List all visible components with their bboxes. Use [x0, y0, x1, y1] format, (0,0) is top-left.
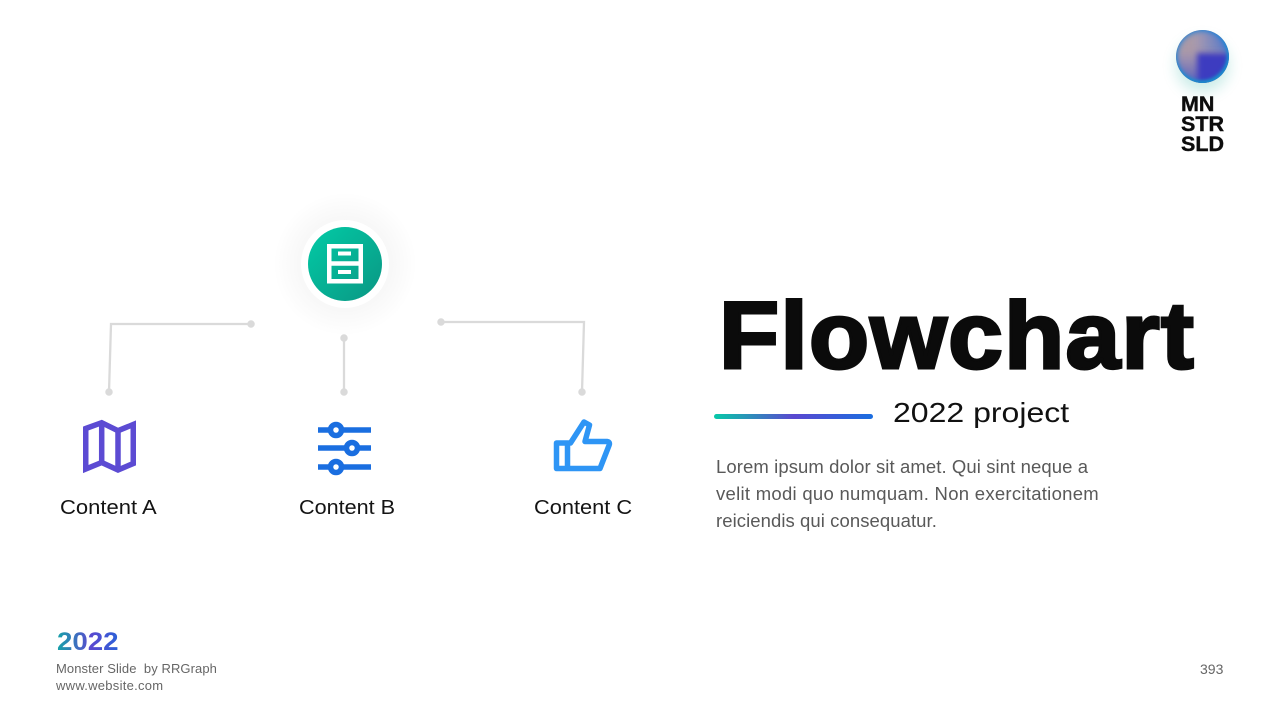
logo	[1170, 30, 1235, 156]
description: Lorem ipsum dolor sit amet. Qui sint neque a	[716, 456, 1088, 477]
logo text: SLD	[1181, 132, 1224, 156]
logo text: MN	[1181, 92, 1214, 116]
logo orb	[1176, 30, 1229, 83]
icon: sliders	[318, 424, 371, 472]
connector middle	[341, 335, 347, 395]
footer credit: Monster Slide by RRGraph	[56, 661, 217, 676]
footer year: 2022	[57, 628, 119, 656]
label: Content C: Content C	[534, 497, 632, 519]
description	[716, 456, 1099, 531]
description: velit modi quo numquam. Non exercitationem	[716, 483, 1099, 504]
logo text: STR	[1181, 112, 1224, 136]
description: reiciendis qui consequatur.	[716, 510, 937, 531]
label: Content A: Content A	[60, 497, 157, 519]
page number: 393	[1200, 661, 1223, 677]
gradient underline	[714, 414, 873, 419]
connector left	[106, 321, 254, 395]
icon: thumbs up	[556, 422, 609, 468]
title: Flowchart	[719, 283, 1195, 389]
logo text	[1181, 92, 1224, 156]
connector right	[438, 319, 585, 395]
icon: filing cabinet node	[273, 192, 417, 336]
footer credit	[56, 661, 217, 692]
flowchart	[83, 227, 612, 476]
label: Content B: Content B	[299, 497, 395, 519]
icon: map	[86, 423, 133, 470]
subtitle: 2022 project	[893, 397, 1069, 428]
footer credit: www.website.com	[56, 678, 163, 692]
